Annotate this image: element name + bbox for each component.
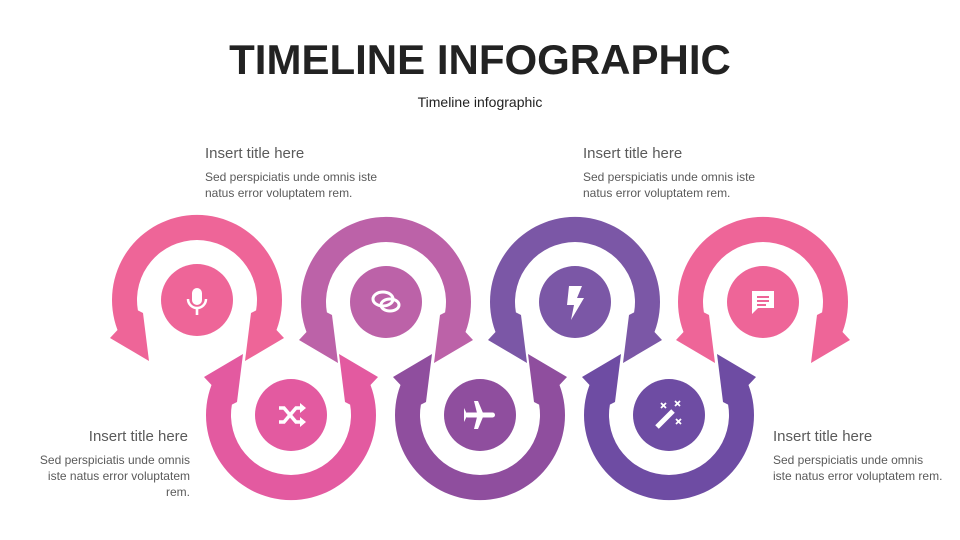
icon: airplane — [464, 401, 495, 429]
text block: top 2: Sed perspiciatis unde omnis iste — [583, 170, 755, 184]
text block: bottom right: Sed perspiciatis unde omnis — [773, 453, 923, 467]
step 7 — [676, 217, 850, 363]
text block: top 1: natus error voluptatem rem. — [205, 186, 352, 200]
icon: shuffle — [279, 403, 306, 427]
icon: message — [752, 291, 774, 314]
text block: bottom left: Sed perspiciatis unde omnis — [40, 453, 190, 467]
icon: microphone — [188, 288, 206, 315]
step 6 — [582, 354, 756, 500]
text block: top 2: Insert title here — [583, 145, 682, 162]
text block: bottom left: iste natus error voluptatem — [48, 469, 190, 483]
text block: top 1: Insert title here — [205, 145, 304, 162]
icon: bolt — [567, 286, 584, 320]
text block: bottom right — [773, 428, 942, 483]
step 4 — [393, 354, 567, 500]
text block: top 1 — [205, 145, 377, 200]
title: TIMELINE INFOGRAPHIC — [229, 36, 731, 83]
subtitle: Timeline infographic — [418, 94, 542, 110]
text block: bottom left: Insert title here — [89, 428, 188, 445]
step 5 — [488, 217, 662, 363]
text block: bottom left: rem. — [166, 485, 190, 499]
text block: top 1: Sed perspiciatis unde omnis iste — [205, 170, 377, 184]
text block: bottom right: iste natus error voluptatem rem. — [773, 469, 942, 483]
text block: top 2: natus error voluptatem rem. — [583, 186, 730, 200]
step 2 — [204, 354, 378, 500]
icon: magic wand — [657, 401, 681, 427]
text block: top 2 — [583, 145, 755, 200]
icon: chat — [373, 292, 399, 311]
text block: bottom right: Insert title here — [773, 428, 872, 445]
step 3 — [299, 217, 473, 363]
step 1 — [110, 215, 284, 361]
text block: bottom left — [40, 428, 190, 499]
